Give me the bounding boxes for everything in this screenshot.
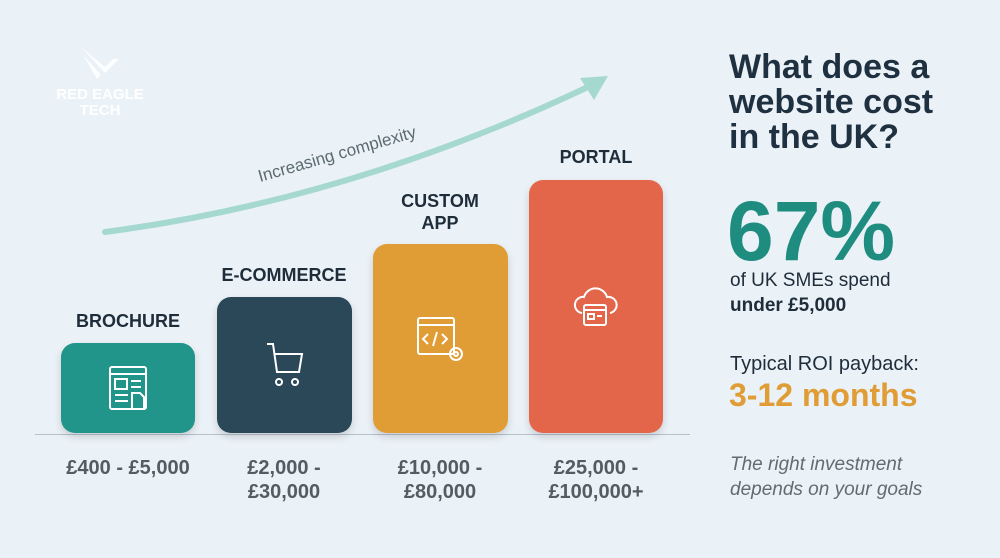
- price: e-commerce: [247, 457, 321, 503]
- stat caption: [730, 270, 891, 316]
- label: e-commerce: E-COMMERCE: [222, 265, 346, 285]
- stat: 67%: 67%: [727, 184, 895, 278]
- closing note: [730, 454, 922, 500]
- bar: custom app: [373, 244, 508, 433]
- title: [728, 48, 933, 156]
- price: custom app: £80,000: [404, 481, 476, 503]
- title: What does a: [729, 48, 929, 86]
- logo: TECH: [80, 102, 120, 119]
- price: e-commerce: £2,000 -: [247, 457, 321, 479]
- price: portal: £25,000 -: [554, 457, 638, 479]
- closing note: The right investment: [730, 454, 902, 475]
- logo: [56, 48, 144, 119]
- ROI label: Typical ROI payback:: [730, 353, 919, 375]
- label: brochure: BROCHURE: [76, 311, 180, 331]
- arrow: increasing complexity: Increasing complexity: [256, 122, 419, 186]
- label: custom app: CUSTOM: [401, 191, 479, 211]
- price: portal: [548, 457, 644, 503]
- label: portal: PORTAL: [560, 147, 632, 167]
- price: custom app: £10,000 -: [398, 457, 482, 479]
- ROI value: 3-12 months: [729, 377, 917, 413]
- title: in the UK?: [729, 118, 899, 156]
- price: portal: £100,000+: [548, 481, 644, 503]
- price: brochure: £400 - £5,000: [66, 457, 190, 479]
- stat caption: of UK SMEs spend: [730, 270, 891, 291]
- axis line: [35, 434, 690, 435]
- label: custom app: APP: [421, 213, 458, 233]
- bar: brochure: [61, 343, 195, 433]
- stat caption: under £5,000: [730, 295, 846, 316]
- label: custom app: [401, 191, 479, 233]
- closing note: depends on your goals: [730, 479, 922, 500]
- price: custom app: [398, 457, 482, 503]
- bar: portal: [529, 180, 663, 433]
- logo: RED EAGLE: [56, 86, 144, 103]
- arrow: increasing complexity: [102, 76, 608, 235]
- bar: e-commerce: [217, 297, 352, 433]
- title: website cost: [729, 83, 933, 121]
- price: e-commerce: £30,000: [248, 481, 320, 503]
